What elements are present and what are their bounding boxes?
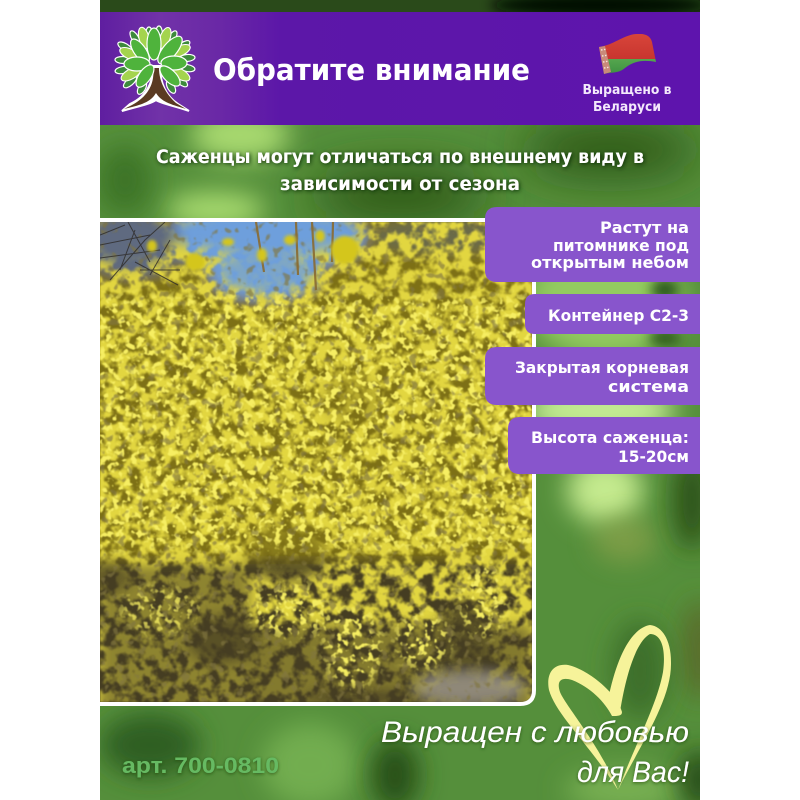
logo: tree [115,26,195,111]
subtitle: зависимости от сезона [280,174,520,195]
feature tag: grown outdoors [485,207,700,282]
feature tag: seedling height: 15-20см [618,447,689,466]
feature tag: closed root system: система [608,377,689,396]
photo frame [100,218,536,706]
icon: Belarus flag [599,34,656,74]
feature tag: seedling height [508,417,700,474]
grown in Belarus label [582,83,672,115]
feature tag: grown outdoors: открытым небом [531,253,689,272]
background: blurred green foliage [97,0,720,800]
feature tag: container [525,294,700,334]
slogan: Выращен с любовью [381,716,689,749]
slogan: для Вас! [577,756,690,789]
subtitle [156,147,644,195]
grown in Belarus label: Беларуси [593,100,661,115]
feature tag: grown outdoors: Растут на [600,218,689,237]
feature tag: container: Контейнер С2-3 [548,306,689,325]
grown in Belarus label: Выращено в [582,83,672,98]
article number: арт. 700-0810 [122,753,279,778]
slogan [381,716,690,789]
feature tag: closed root system [485,347,700,405]
icon: heart [548,625,671,790]
header banner [100,12,700,125]
feature tag: grown outdoors: питомнике под [553,236,689,255]
photo: yellow forsythia bush [100,222,532,702]
title: Обратите внимание [213,53,530,87]
feature tag: closed root system: Закрытая корневая [515,358,689,377]
feature tag: seedling height: Высота саженца: [531,428,689,447]
subtitle: Саженцы могут отличаться по внешнему виду в [156,147,644,168]
